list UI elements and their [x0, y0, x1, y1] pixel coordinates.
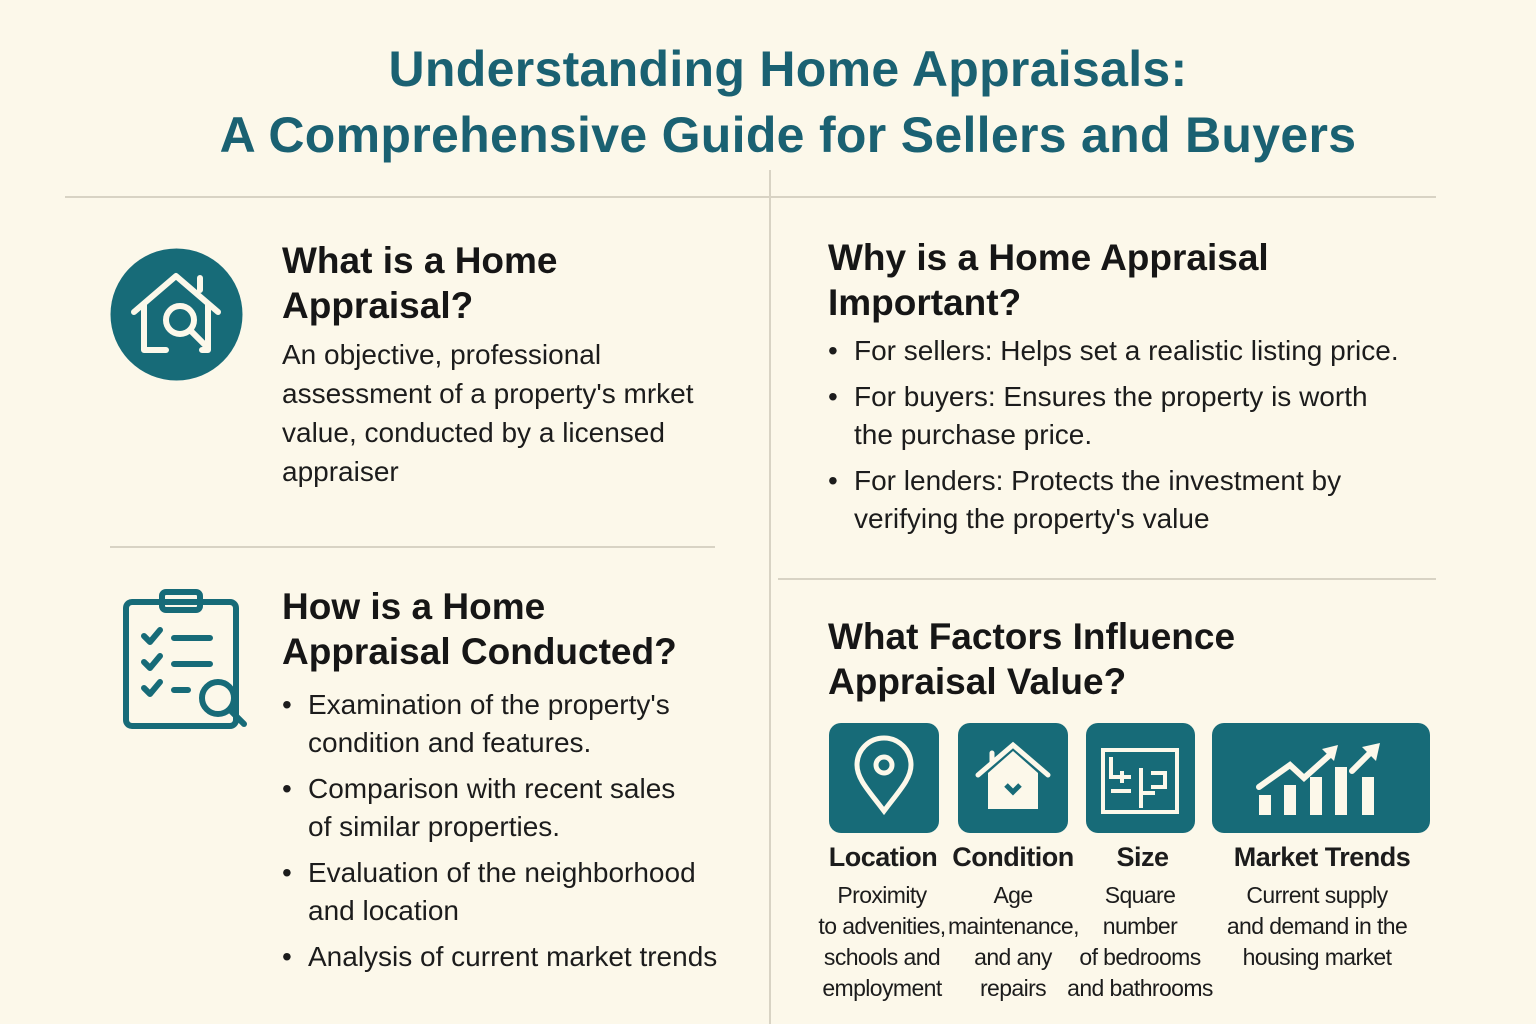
tile: condition — [958, 723, 1068, 833]
desc: market trends: housing market — [1243, 944, 1391, 970]
bullets: how: condition and features. — [308, 727, 591, 758]
heading: what is: Appraisal? — [282, 285, 473, 326]
desc: market trends: and demand in the — [1227, 913, 1407, 939]
bullets: how: Examination of the property's — [308, 689, 670, 720]
text: what is — [282, 339, 694, 487]
label: location: Location — [829, 842, 937, 872]
heading: what is: What is a Home — [282, 240, 558, 281]
bullets: why — [829, 335, 1399, 534]
icon: house magnifier — [110, 248, 242, 380]
label: market trends: Market Trends — [1234, 842, 1410, 872]
desc: location: employment — [822, 975, 942, 1001]
desc: size: Square — [1105, 882, 1175, 908]
desc: location: Proximity — [837, 882, 927, 908]
label: condition: Condition — [952, 842, 1074, 872]
bullets: why: For buyers: Ensures the property is worth — [854, 381, 1368, 412]
desc: condition: and any — [974, 944, 1052, 970]
title: A Comprehensive Guide for Sellers and Buyers — [220, 107, 1356, 163]
tile: market trends — [1212, 723, 1430, 833]
desc: location — [818, 882, 946, 1001]
desc: size — [1067, 882, 1213, 1001]
bullets: how: and location — [308, 895, 459, 926]
bullets: how: Analysis of current market trends — [308, 941, 717, 972]
tile: size — [1086, 723, 1195, 833]
bullets: how: Evaluation of the neighborhood — [308, 857, 696, 888]
heading: how — [282, 586, 677, 672]
desc: condition: maintenance, — [948, 913, 1079, 939]
bullets: why: For lenders: Protects the investment by — [854, 465, 1341, 496]
heading: why — [828, 237, 1269, 323]
heading: what is — [282, 240, 558, 326]
desc: size: of bedrooms — [1079, 944, 1201, 970]
desc: market trends: Current supply — [1246, 882, 1388, 908]
label: size: Size — [1116, 842, 1169, 872]
text: what is: An objective, professional — [282, 339, 601, 370]
desc: condition: Age — [993, 882, 1033, 908]
text: what is: assessment of a property's mrket — [282, 378, 694, 409]
desc: condition: repairs — [980, 975, 1046, 1001]
tile: location — [829, 723, 939, 833]
desc: condition — [948, 882, 1079, 1001]
bullets: how: of similar properties. — [308, 811, 560, 842]
bullets: why: For sellers: Helps set a realistic listing price. — [854, 335, 1399, 366]
bullets: why: verifying the property's value — [854, 503, 1210, 534]
desc: location: schools and — [824, 944, 940, 970]
heading: how: Appraisal Conducted? — [282, 631, 677, 672]
text: what is: appraiser — [282, 456, 399, 487]
title — [220, 41, 1356, 163]
heading: how: How is a Home — [282, 586, 545, 627]
heading: factors: What Factors Influence — [828, 616, 1235, 657]
desc: location: to advenities, — [818, 913, 946, 939]
title: Understanding Home Appraisals: — [389, 41, 1187, 97]
text: what is: value, conducted by a licensed — [282, 417, 665, 448]
bullets: why: the purchase price. — [854, 419, 1092, 450]
heading: why: Why is a Home Appraisal — [828, 237, 1269, 278]
desc: size: number — [1103, 913, 1177, 939]
bullets: how — [283, 689, 717, 972]
heading: factors: Appraisal Value? — [828, 661, 1126, 702]
bullets: how: Comparison with recent sales — [308, 773, 675, 804]
heading: why: Important? — [828, 282, 1021, 323]
desc: size: and bathrooms — [1067, 975, 1213, 1001]
desc: market trends — [1227, 882, 1407, 970]
heading: factors — [828, 616, 1235, 702]
icon: clipboard — [123, 589, 247, 729]
